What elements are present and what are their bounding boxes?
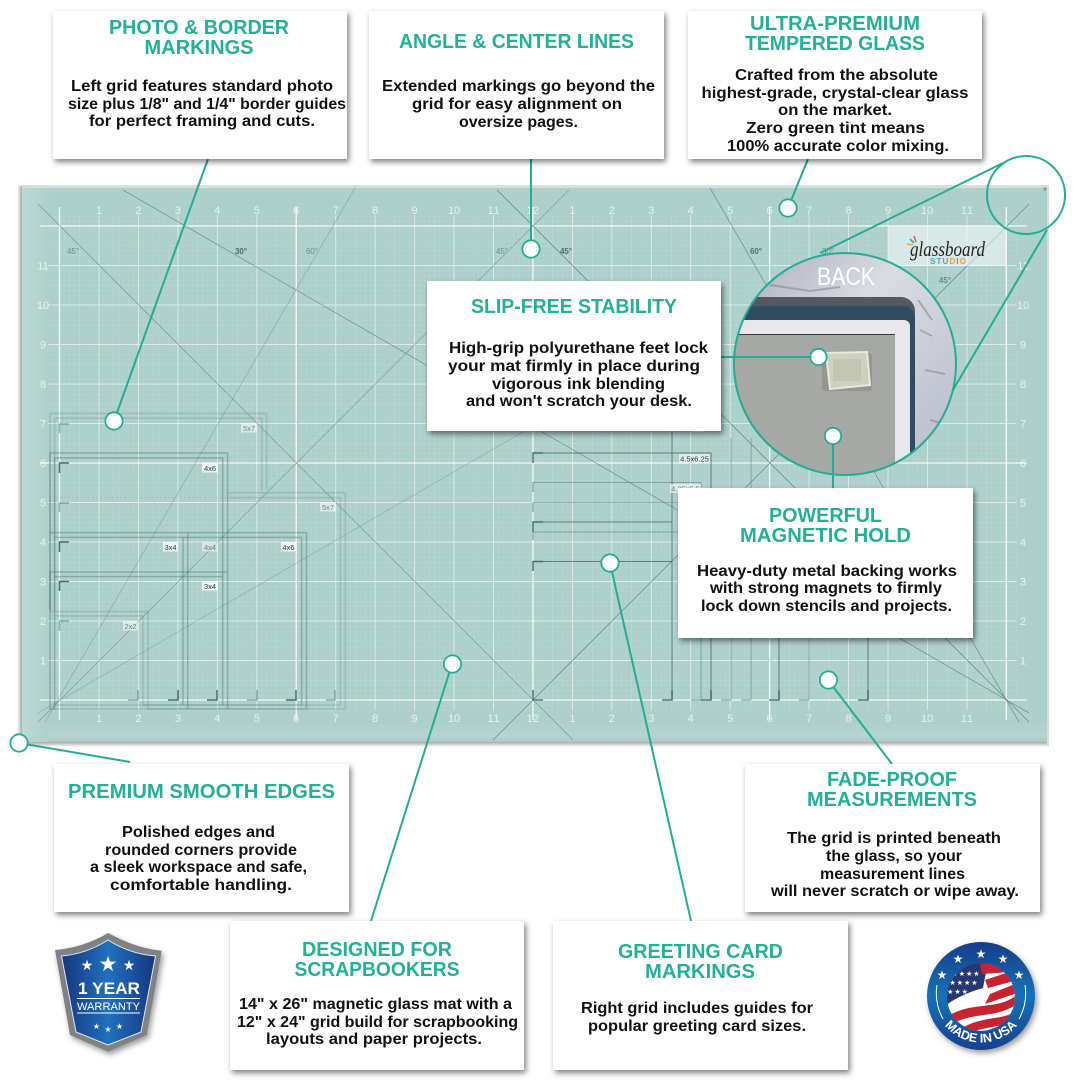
made in usa text: MADE IN USA <box>945 1020 1018 1042</box>
mat corner screw <box>1043 187 1047 191</box>
panel: slip-free stability <box>427 281 721 431</box>
frame size labels: 4x6 <box>204 464 216 473</box>
leader lines <box>19 159 892 921</box>
badge: made in USA <box>926 941 1040 1057</box>
warranty text: 1 YEAR <box>78 979 140 998</box>
body: oversize pages. <box>459 114 578 131</box>
warranty text <box>77 979 141 1013</box>
stars <box>937 947 1024 982</box>
stars <box>81 953 135 1034</box>
flag: ★★★ <box>947 988 969 996</box>
ruler numbers bottom: 1234567891011121234567891011 <box>96 713 973 725</box>
ruler numbers right: 2 <box>1020 616 1026 628</box>
stars: ★ <box>116 1022 123 1031</box>
ruler numbers left: 6 <box>40 458 46 470</box>
frame size labels: 3x4 <box>164 543 177 552</box>
stars: ★ <box>976 947 986 961</box>
body: size plus 1/8" and 1/4" border guides <box>68 96 346 113</box>
body <box>448 340 708 410</box>
body: Crafted from the absolute <box>735 67 938 84</box>
ruler numbers left: 4 <box>40 537 46 549</box>
body: on the market. <box>778 102 892 119</box>
heading: PHOTO & BORDER <box>109 16 289 39</box>
magnifier tangent lines <box>820 163 1047 390</box>
panel: photo & border markings <box>53 11 347 159</box>
logo <box>888 226 1006 266</box>
greeting card guides <box>533 425 868 700</box>
mat right edge <box>1047 186 1049 744</box>
magnifier outline <box>734 253 956 475</box>
body: comfortable handling. <box>110 877 292 894</box>
ruler numbers left: 2 <box>40 616 46 628</box>
heading: MEASUREMENTS <box>807 788 977 811</box>
ruler numbers right: 8 <box>1020 379 1026 391</box>
heading: SCRAPBOOKERS <box>294 958 460 981</box>
ruler numbers right: 6 <box>1020 458 1026 470</box>
made in usa arc guide <box>937 1012 1025 1042</box>
angle labels: 60° <box>750 247 762 256</box>
heading: MAGNETIC HOLD <box>740 524 911 547</box>
heading: SLIP-FREE STABILITY <box>471 295 677 318</box>
panel: fade-proof measurements <box>745 764 1040 912</box>
stars: ★ <box>953 952 963 966</box>
flag: ★★★★ <box>951 970 981 978</box>
heading <box>740 504 911 547</box>
body <box>90 824 307 894</box>
angle labels: 45° <box>939 276 951 285</box>
heading <box>745 12 925 55</box>
body: will never scratch or wipe away. <box>770 883 1019 900</box>
panel: ultra-premium tempered glass <box>688 11 982 159</box>
glass mat <box>17 185 1049 747</box>
body: a sleek workspace and safe, <box>90 859 307 876</box>
arc lines <box>936 985 1026 1019</box>
heading: MARKINGS <box>144 36 254 59</box>
angle labels: 60° <box>306 247 318 256</box>
ruler numbers left: 9 <box>40 340 46 352</box>
stars: ★ <box>1014 968 1024 982</box>
panel: greeting card markings <box>553 921 848 1070</box>
flag: ★★★★ <box>949 979 979 987</box>
body <box>237 996 518 1048</box>
badge: 1 year warranty <box>55 933 162 1052</box>
heading: TEMPERED GLASS <box>745 32 925 55</box>
body: Left grid features standard photo <box>71 78 333 95</box>
body: 100% accurate color mixing. <box>727 138 949 155</box>
ruler numbers right: 7 <box>1020 418 1026 430</box>
body: layouts and paper projects. <box>266 1031 482 1048</box>
card size labels <box>670 423 710 494</box>
ruler numbers right: 5 <box>1020 498 1026 510</box>
stars: ★ <box>123 957 135 973</box>
frame size labels: 4x6 <box>282 543 295 552</box>
ruler numbers left <box>37 260 49 668</box>
ruler numbers top: 1234567891011121234567891011 <box>96 205 973 217</box>
ruler numbers right: 9 <box>1020 340 1026 352</box>
heading: PREMIUM SMOOTH EDGES <box>68 780 335 803</box>
heading: ANGLE & CENTER LINES <box>399 30 634 53</box>
callout dots <box>10 199 841 752</box>
panel: powerful magnetic hold <box>678 488 973 638</box>
frame size labels: 4x4 <box>204 543 216 552</box>
ruler numbers left: 1 <box>40 656 46 668</box>
heading: MARKINGS <box>645 960 755 983</box>
body: 12" x 24" grid build for scrapbooking <box>237 1014 518 1031</box>
body: measurement lines <box>820 866 965 883</box>
angle labels: 45° <box>67 247 79 256</box>
angle labels: 30° <box>235 247 247 256</box>
heading <box>109 16 289 59</box>
heading <box>294 938 460 981</box>
frame size labels: 5x7 <box>243 424 255 433</box>
body <box>382 78 655 131</box>
card size labels: x7 <box>693 424 701 432</box>
flag <box>947 963 1015 1031</box>
mat bottom edge <box>20 742 1049 747</box>
inch grid lines <box>48 215 1016 710</box>
body: The grid is printed beneath <box>787 830 1001 847</box>
panel: designed for scrapbookers <box>230 921 524 1070</box>
heading <box>807 768 977 811</box>
warranty text: WARRANTY <box>77 1001 141 1013</box>
mat surface <box>22 188 1047 742</box>
body: High-grip polyurethane feet lock <box>449 340 708 357</box>
ruler numbers left: 11 <box>37 260 49 272</box>
body: vigorous ink blending <box>492 376 665 393</box>
body: the glass, so your <box>826 848 962 865</box>
panel: angle & center lines <box>369 11 664 159</box>
magnifier small circle <box>987 156 1065 234</box>
major grid lines <box>40 207 1027 720</box>
body: rounded corners provide <box>105 842 297 859</box>
ruler numbers right: 11 <box>1017 260 1029 272</box>
angle lines <box>38 188 1029 740</box>
body <box>702 67 969 155</box>
panel: premium smooth edges <box>54 764 349 912</box>
stars: ★ <box>104 1025 112 1034</box>
ruler numbers right: 4 <box>1020 537 1026 549</box>
heading: ULTRA-PREMIUM <box>750 12 920 35</box>
stars: ★ <box>93 1022 100 1031</box>
ruler numbers left: 7 <box>40 418 46 430</box>
photo size frames <box>50 414 345 710</box>
logo: glassboard <box>910 237 985 261</box>
ruler numbers left: 10 <box>37 300 49 312</box>
ruler numbers right <box>1017 260 1029 668</box>
body: Heavy-duty metal backing works <box>697 563 957 580</box>
mat left edge <box>17 186 22 746</box>
body <box>697 563 957 615</box>
body <box>770 830 1019 900</box>
logo: STUDIO <box>930 257 966 266</box>
half inch grid <box>48 216 1018 711</box>
angle labels: 45° <box>496 247 508 256</box>
heading: GREETING CARD <box>618 940 783 963</box>
body: your mat firmly in place during <box>448 358 700 375</box>
ruler numbers left: 5 <box>40 498 46 510</box>
heading: DESIGNED FOR <box>302 938 452 961</box>
mat top edge <box>22 185 1049 188</box>
body: Zero green tint means <box>746 120 925 137</box>
frame size labels: 5x7 <box>322 503 334 512</box>
frame size labels: 2x2 <box>124 622 137 631</box>
body: lock down stencils and projects. <box>701 598 952 615</box>
fine grid <box>48 216 1018 711</box>
body: grid for easy alignment on <box>412 96 622 113</box>
body: and won't scratch your desk. <box>466 393 692 410</box>
ruler numbers right: 10 <box>1017 300 1029 312</box>
frame corner marks <box>60 424 335 700</box>
heading: POWERFUL <box>769 504 882 527</box>
stars: ★ <box>99 953 117 976</box>
heading: FADE-PROOF <box>827 768 957 791</box>
card size labels: 4.5x6.25 <box>680 454 709 464</box>
body: 14" x 26" magnetic glass mat with a <box>239 996 512 1013</box>
body <box>68 78 346 130</box>
card size labels: 4.25x5.5 <box>671 484 700 494</box>
body: for perfect framing and cuts. <box>89 113 315 130</box>
body: popular greeting card sizes. <box>588 1018 806 1035</box>
angle labels: 30° <box>822 247 834 256</box>
body: with strong magnets to firmly <box>709 580 942 597</box>
ruler numbers right: 3 <box>1020 576 1026 588</box>
frame size labels <box>123 423 336 631</box>
body <box>581 1000 813 1035</box>
angle labels: 45° <box>560 247 572 256</box>
body: Extended markings go beyond the <box>382 78 655 95</box>
stars: ★ <box>81 957 93 973</box>
body: Right grid includes guides for <box>581 1000 813 1017</box>
frame size labels: 3x4 <box>204 582 216 591</box>
body: highest-grade, crystal-clear glass <box>702 85 969 102</box>
BACK label: BACK <box>817 263 875 291</box>
ruler numbers left: 8 <box>40 379 46 391</box>
body: Polished edges and <box>122 824 275 841</box>
stars: ★ <box>937 968 947 982</box>
angle labels <box>67 247 951 285</box>
stars: ★ <box>998 952 1008 966</box>
ruler numbers left: 3 <box>40 576 46 588</box>
mat bottom edge highlight <box>48 722 1047 742</box>
heading <box>618 940 783 983</box>
mat left edge highlight <box>22 188 50 742</box>
back photo <box>735 254 955 474</box>
ruler numbers right: 1 <box>1020 656 1026 668</box>
magnifier: back of mat <box>733 252 957 476</box>
